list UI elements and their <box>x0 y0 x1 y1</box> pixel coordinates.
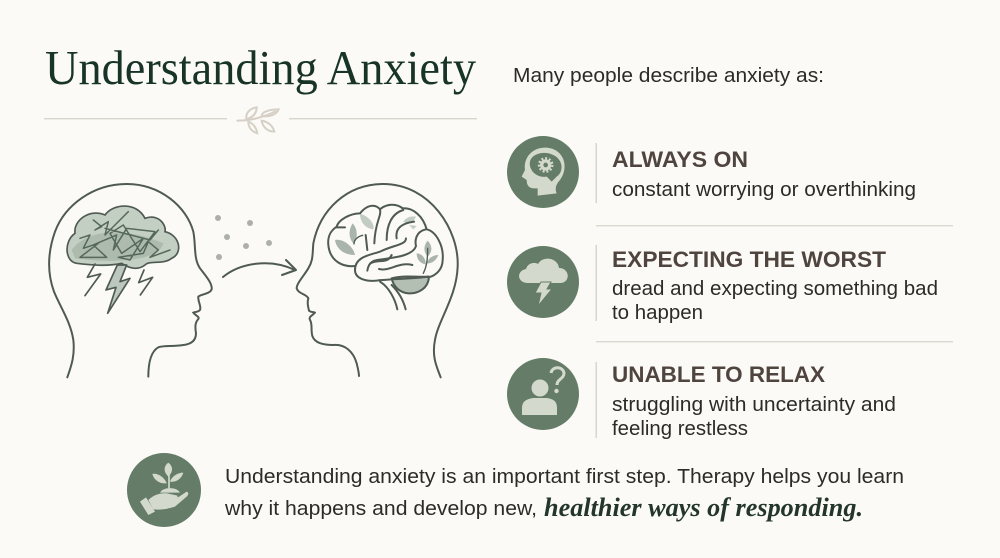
icon: head with gear <box>507 136 579 208</box>
title: Understanding Anxiety <box>45 40 476 95</box>
item: expecting the worst <box>507 245 938 324</box>
thought dots <box>215 215 272 260</box>
closing text: why it happens and develop new, <box>224 498 537 520</box>
cerebellum <box>392 276 429 293</box>
closing text: healthier ways of responding. <box>544 493 863 522</box>
head outline <box>297 184 458 377</box>
lightning bolts <box>85 264 101 296</box>
item: unable to relax <box>507 358 896 440</box>
brain outline <box>328 205 443 277</box>
item heading: ALWAYS ON <box>612 147 748 172</box>
item description: struggling with uncertainty and <box>612 394 896 416</box>
item heading: UNABLE TO RELAX <box>612 362 825 387</box>
storm cloud <box>67 206 179 268</box>
item description: to happen <box>612 302 703 324</box>
scribble <box>80 212 170 260</box>
closing text: Understanding anxiety is an important first step. Therapy helps you learn <box>225 466 904 488</box>
head outline <box>49 184 212 377</box>
brain folds <box>337 209 414 250</box>
title divider with leaf <box>44 107 477 133</box>
item heading: EXPECTING THE WORST <box>612 247 887 272</box>
item description: feeling restless <box>612 418 748 440</box>
item description: dread and expecting something bad <box>612 278 938 300</box>
illustration: calm head <box>297 184 458 377</box>
intro line: Many people describe anxiety as: <box>513 65 824 87</box>
icon: person with question mark <box>507 358 579 430</box>
illustration: anxious head <box>49 184 212 377</box>
item description: constant worrying or overthinking <box>612 179 916 201</box>
leaves <box>335 214 438 264</box>
icon: hand holding plant <box>127 453 201 527</box>
icon: storm cloud <box>507 246 579 318</box>
item: always on <box>507 136 916 208</box>
brain stem <box>380 282 406 309</box>
arrow <box>223 260 296 277</box>
closing text <box>224 466 904 522</box>
